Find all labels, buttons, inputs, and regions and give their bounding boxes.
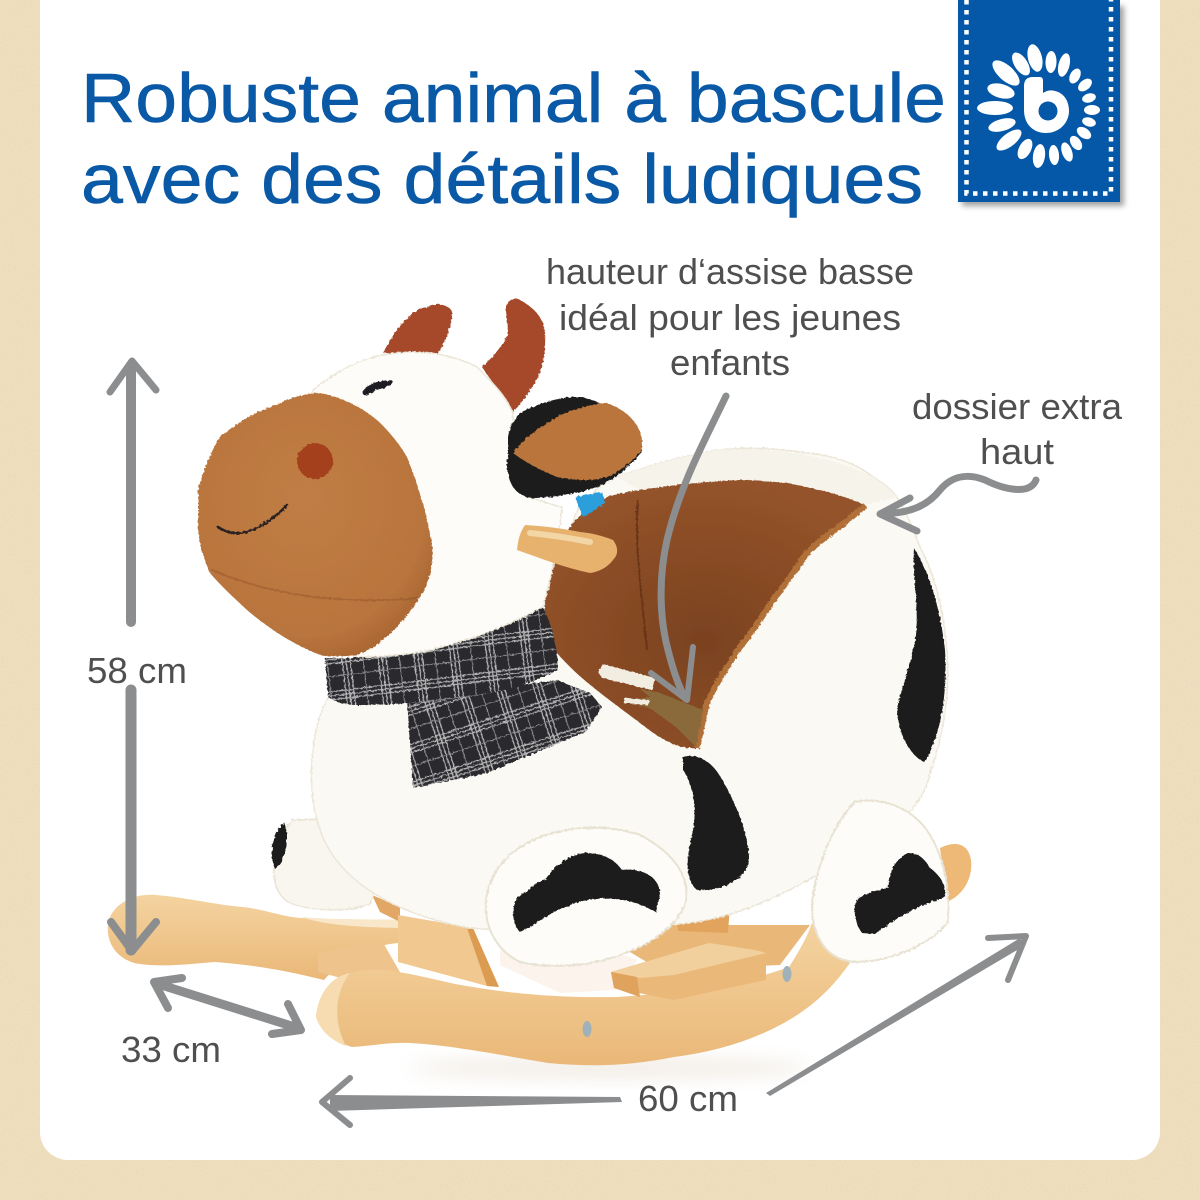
title: Robuste animal à bascule [81, 59, 946, 137]
arrow: depth 33 cm [154, 978, 301, 1034]
rocker: far side runner [108, 844, 971, 980]
seat crease [637, 500, 647, 650]
callout: low seat height [546, 251, 914, 383]
back leg left [272, 819, 374, 910]
black spot: flank [897, 548, 945, 762]
seat belt [598, 664, 703, 747]
eye [362, 381, 393, 395]
screw [582, 1021, 592, 1037]
callout: extra high backrest: dossier extra [912, 386, 1123, 427]
arrow: seat height callout [651, 396, 726, 700]
blue tag [575, 492, 605, 517]
label: depth: 33 cm [121, 1029, 221, 1070]
title: avec des détails ludiques [81, 140, 923, 218]
arrow: width 60 cm right [766, 936, 1026, 1096]
callout: low seat height: enfants [670, 342, 790, 383]
black spot: belly [683, 756, 749, 890]
arrow: backrest callout [880, 476, 1036, 531]
callout: low seat height: hauteur d‘assise basse [546, 251, 914, 292]
title [81, 59, 946, 218]
cow plush [198, 298, 948, 966]
horns [383, 298, 545, 412]
rocker: near side runner [316, 923, 852, 1065]
logo: flower petals [977, 43, 1100, 169]
back leg right [812, 801, 948, 962]
cow body [311, 448, 948, 930]
label: height: 58 cm [87, 650, 187, 691]
callout: extra high backrest: haut [980, 431, 1054, 472]
seat rim [697, 505, 865, 748]
rocker: crossbars and supports [318, 895, 810, 993]
label: width: 60 cm [638, 1078, 738, 1119]
front leg [486, 828, 686, 966]
floor shadow [410, 1058, 810, 1078]
head [198, 352, 562, 657]
mouth crease [212, 570, 420, 600]
nostril [297, 443, 333, 479]
rocker: foot rest [611, 943, 766, 1000]
logo: bieco tag [958, 0, 1124, 206]
arrow: height 58 cm [110, 361, 156, 951]
seat interior [545, 480, 865, 748]
logo: letter b [1024, 77, 1069, 133]
ear [507, 397, 642, 498]
scarf [325, 607, 602, 788]
wooden handle [517, 525, 617, 573]
muzzle [198, 393, 433, 656]
arrow: width 60 cm left [322, 1078, 622, 1125]
callout: extra high backrest [912, 386, 1123, 472]
product: plush cow rocking horse [108, 298, 971, 1078]
smile [218, 505, 287, 533]
callout: low seat height: idéal pour les jeunes [559, 297, 901, 338]
